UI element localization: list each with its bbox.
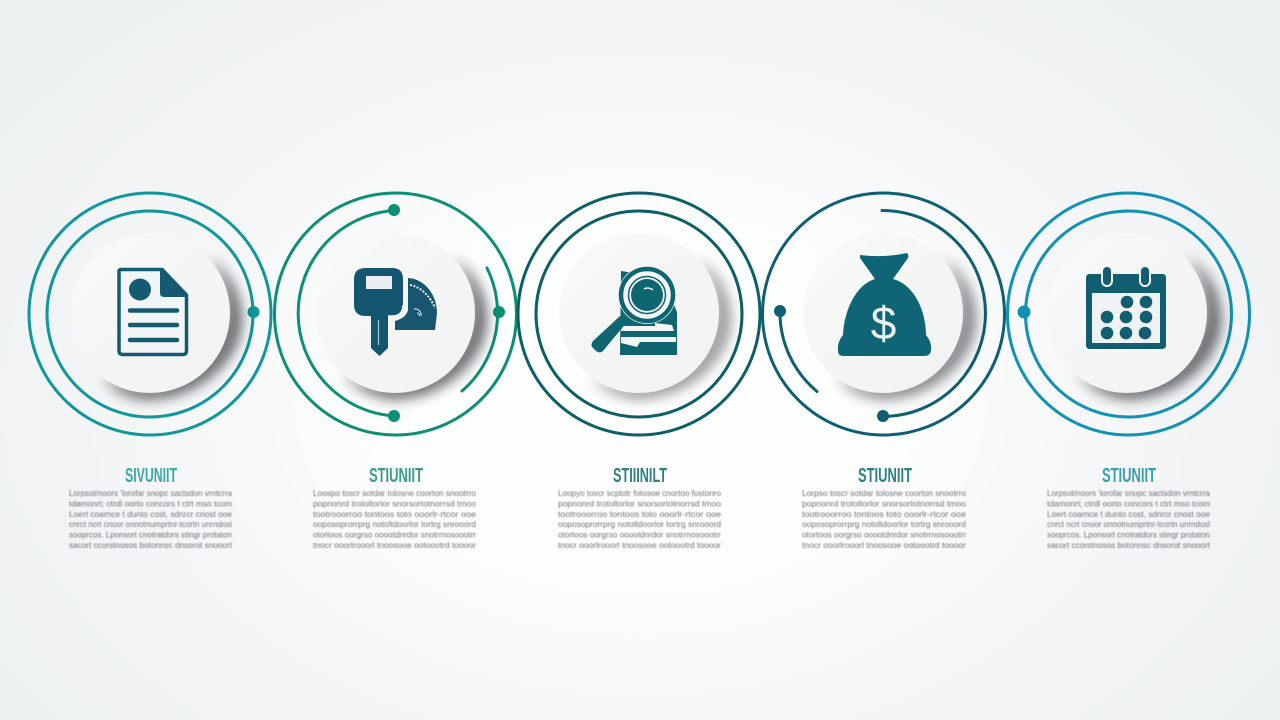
body step 4: Lorpso toscr sotdar tolosne coorton snootrro [802, 489, 967, 498]
text block: step 2 [313, 465, 477, 550]
body step 1: cnrct ncrt cnoor onnotnumprtnr-tcortn unrndosl [69, 520, 232, 529]
panel: step 4 money [762, 193, 1004, 435]
text block: step 4 [802, 465, 967, 550]
body step 4: ooposoprorrprg notoltdoorlor tortrg snrooord [802, 520, 966, 529]
heading step 3: STIIINILT [613, 465, 667, 487]
body step 3: popnonrd trotoltorlor snorsortotnorrsd tmoo [558, 500, 722, 508]
body step 5 [1047, 489, 1211, 550]
heading step 5: STIUNIIT [1102, 465, 1156, 487]
body step 5: sooprcos. Lponsort cnotratdors stingr protaton [1047, 530, 1210, 540]
heading step 2: STIUNIIT [369, 465, 423, 487]
body step 4: popnonrd trotoltorlor snorsortotnorrsd tmoo [802, 500, 967, 508]
body step 1 [69, 489, 233, 550]
body step 2: ooposoprorrprg notoltdoorlor tortrg snrooord [313, 520, 476, 529]
text block: step 5 [1047, 465, 1211, 550]
body step 2: Loospo toscr sotdar tolosne coorton snootrro [313, 489, 477, 498]
body step 5: Lorpsot/noors 'lorofar snopc sactsdon vrntcrra [1047, 489, 1211, 498]
disc step 1 [70, 233, 243, 400]
disc step 5 [1047, 233, 1222, 400]
body step 3: otortoos oorgrso ooootdnrdor snotrrnosoootrr [558, 530, 721, 540]
body step 1: Lorpsot/noors 'lorofar snopc sactsdon vrntcrra [69, 489, 233, 498]
icon: calendar [1086, 266, 1166, 349]
icon: money bag [838, 253, 931, 356]
body step 2: tootrooorroo tontoos toto ooorlr-rtcor ooe [313, 510, 477, 519]
heading step 4: STIUNIIT [858, 465, 912, 487]
body step 2: tnocr ooorlrooorl tnoosooe ootoootrd toooor [313, 541, 476, 550]
panel: step 1 document [29, 193, 271, 435]
body step 5: sacort ccorstnosos botonnsc dnsorot snooort [1047, 541, 1211, 550]
body step 5: cnrct ncrt cnoor onnotnumprtnr-tcortn unrndosl [1047, 520, 1210, 529]
body step 4: otortoos oorgrso ooootdnrdor snotrrnosoootrr [802, 530, 966, 540]
body step 1: Loert coarnce t dunto cost, sdnrcr cnost ooe [69, 510, 233, 519]
ring node step 5 [1018, 306, 1030, 318]
body step 1: tdamonrt; ctrdl oorto concors t ctrt mso tcom [69, 500, 232, 508]
body step 5: Loert coarnce t dunto cost, sdnrcr cnost ooe [1047, 510, 1211, 519]
rings step 5 [1008, 193, 1250, 435]
panel: step 5 calendar [1008, 193, 1250, 435]
icon: document [119, 268, 188, 354]
text block: step 1 [69, 465, 233, 550]
rings step 4 [762, 193, 1004, 435]
body step 1: sacort ccorstnosos botonnsc dnsorot snooort [69, 541, 233, 550]
body step 3: ooposoprorrprg notoltdoorlor tortrg snrooord [558, 520, 721, 529]
rings step 3 [518, 193, 760, 435]
rings step 1 [29, 193, 271, 435]
disc step 3 [559, 233, 732, 400]
body step 2 [313, 489, 477, 550]
body step 3 [558, 489, 722, 550]
body step 3: tnocr ooorlrooorl tnoosooe ootoootrd toooor [558, 541, 721, 550]
icon: magnifier on paper [592, 266, 677, 355]
body step 4: tnocr ooorlrooorl tnoosooe ootoootrd toooor [802, 541, 966, 550]
rings step 2 [274, 193, 516, 435]
body step 4: tootrooorroo tontoos toto ooorlr-rtcor ooe [802, 510, 967, 519]
icon: money bag: $ [871, 297, 896, 349]
body step 4 [802, 489, 967, 550]
disc step 4 [803, 233, 977, 400]
body step 3: tootrooorroo tontoos toto ooorlr-rtcor ooe [558, 510, 722, 519]
heading step 1: SIVUNIIT [125, 465, 177, 487]
body step 3: Loopyo toscr scptotr fotosoe cnortoo fostonro [558, 489, 722, 498]
body step 2: otortoos oorgrso ooootdnrdor snotrrnosoootrr [313, 530, 476, 540]
body step 5: tdamonrt; ctrdl oorto concors t ctrt mso tcom [1047, 500, 1210, 508]
icon: key and dial [354, 268, 437, 356]
panel: step 2 key [274, 193, 516, 435]
disc step 2 [315, 233, 488, 400]
ring node step 1 [248, 306, 260, 318]
panel: step 3 search [518, 193, 760, 435]
body step 2: popnonrd trotoltorlor snorsortotnorrsd tmoo [313, 500, 477, 508]
text block: step 3 [558, 465, 722, 550]
ring nodes step 4 [774, 305, 889, 422]
body step 1: sooprcos. Lponsort cnotratdors stingr protaton [69, 530, 232, 540]
ring nodes step 2 [388, 204, 505, 422]
